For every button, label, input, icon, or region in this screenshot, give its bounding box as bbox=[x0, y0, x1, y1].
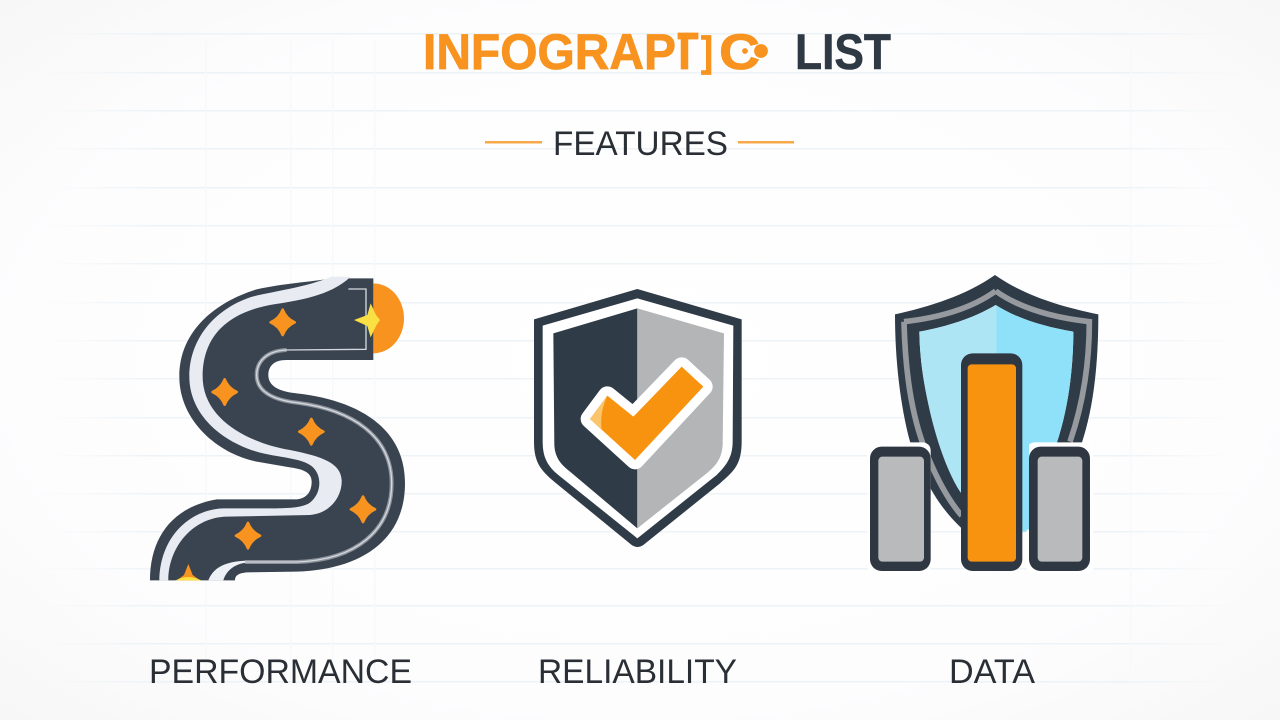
road stars bbox=[213, 310, 375, 548]
icon: reliability shield with check bbox=[534, 289, 742, 547]
yellow star on sun bbox=[354, 303, 380, 337]
shield outer frame bbox=[534, 289, 742, 547]
bottom star bbox=[176, 564, 202, 580]
shield white inset bbox=[543, 298, 733, 538]
shield frame bbox=[895, 275, 1098, 528]
label: data: DATA bbox=[949, 653, 1035, 691]
right bar bbox=[1029, 447, 1090, 571]
road lower gap bbox=[208, 561, 247, 580]
road silhouette bbox=[150, 278, 405, 580]
title bbox=[423, 24, 768, 80]
shield dark half bbox=[553, 308, 637, 528]
label: performance: PERFORMANCE bbox=[149, 653, 412, 691]
road light edge stripe bbox=[159, 277, 351, 580]
subtitle: features: FEATURES bbox=[553, 125, 728, 163]
road inner lines bbox=[245, 289, 392, 562]
label: reliability: RELIABILITY bbox=[538, 653, 737, 691]
white halo left bar bbox=[867, 442, 931, 574]
left bar bbox=[870, 447, 931, 571]
check mark bbox=[590, 367, 703, 460]
shield gray half bbox=[637, 308, 724, 528]
sun behind road bbox=[373, 283, 404, 353]
white halo right bar bbox=[1027, 442, 1093, 574]
blue gap between bars bbox=[1022, 442, 1029, 530]
shield sky fill bbox=[919, 305, 1073, 532]
center bar bbox=[961, 353, 1022, 571]
title word: infographic: C bbox=[719, 24, 760, 80]
title word: infographic: ] bbox=[701, 28, 713, 75]
title word: infographic: I bbox=[678, 24, 691, 80]
shield gray band bbox=[904, 291, 1089, 516]
icon: data shield with bars bbox=[867, 275, 1098, 574]
title word: list: LIST bbox=[795, 24, 891, 80]
title word: infographic: INFOGRAP bbox=[423, 24, 676, 80]
icon: performance winding road bbox=[150, 277, 405, 583]
